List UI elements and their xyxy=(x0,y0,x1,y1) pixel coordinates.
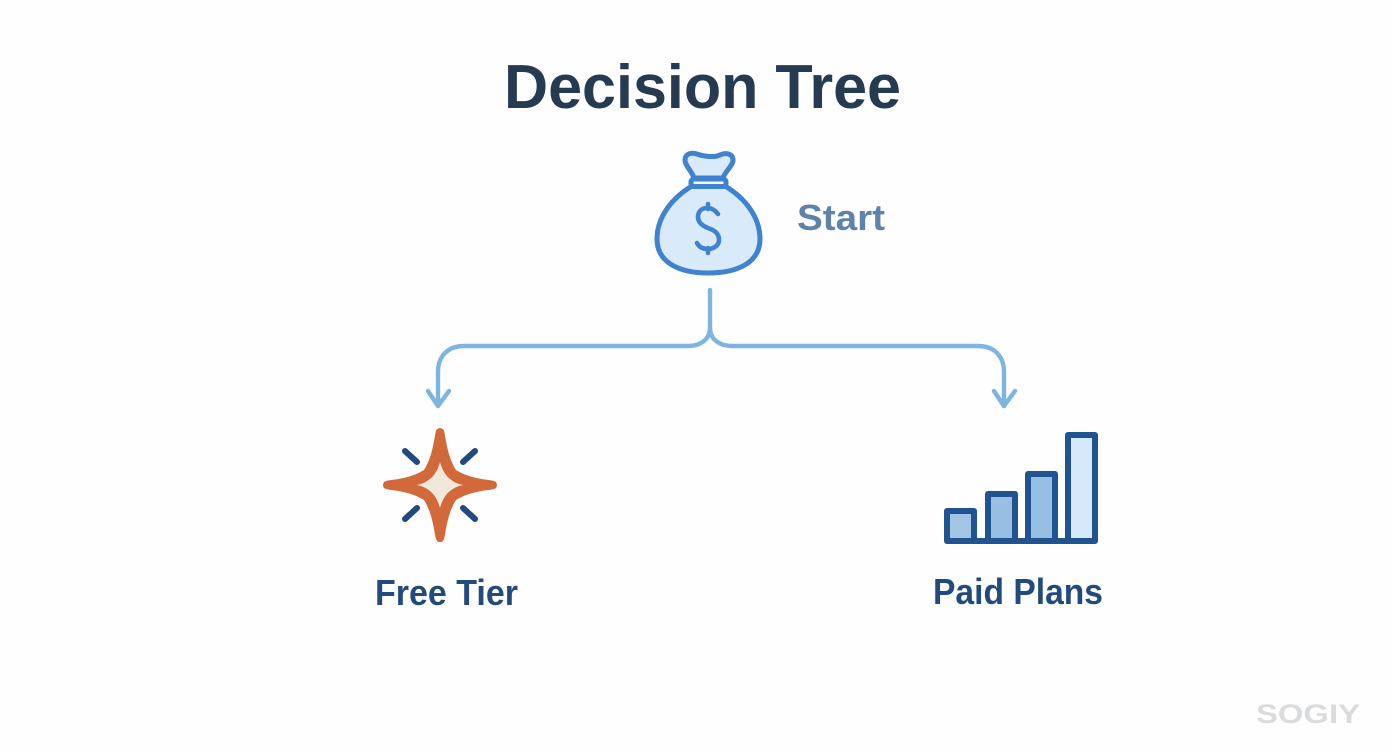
icon: money bag xyxy=(657,153,760,273)
label: paid plans: Paid Plans xyxy=(933,571,1103,612)
icon: sparkle star xyxy=(383,428,497,542)
label: free tier: Free Tier xyxy=(375,572,518,613)
title: Decision Tree xyxy=(504,53,901,122)
sparkle rays xyxy=(405,451,475,519)
branching arrows xyxy=(428,290,1015,406)
icon: dollar sign xyxy=(697,204,719,253)
watermark: SOGIY xyxy=(1256,699,1360,729)
label: start: Start xyxy=(797,197,885,238)
arrowhead: right xyxy=(994,391,1015,406)
arrowhead: left xyxy=(428,391,449,406)
icon: rising bar chart xyxy=(947,435,1095,541)
